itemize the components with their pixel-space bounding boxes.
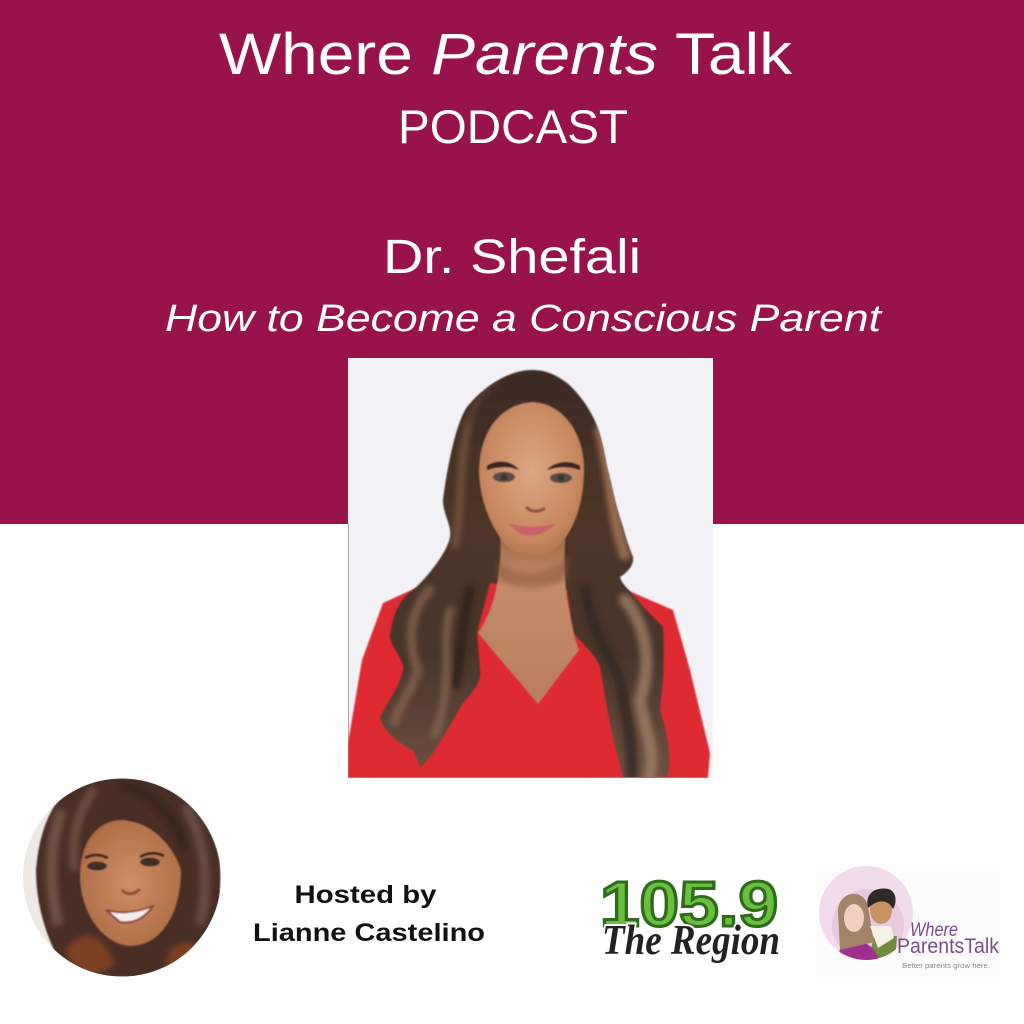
guest name: Dr. Shefali bbox=[383, 231, 641, 284]
background band bbox=[0, 0, 1024, 524]
logo: 105.9 The Region: 105.9 bbox=[600, 868, 778, 940]
hosted by label: Hosted by bbox=[294, 881, 437, 909]
logo: 105.9 The Region: The Region bbox=[602, 918, 780, 964]
host portrait bbox=[23, 778, 221, 985]
face bbox=[479, 402, 584, 555]
guest portrait bbox=[348, 358, 713, 778]
title: Where Parents Talk bbox=[219, 22, 793, 87]
subtitle: podcast: PODCAST bbox=[398, 100, 628, 153]
logo: Where Parents Talk: Where bbox=[910, 920, 958, 941]
hosted by label bbox=[253, 881, 485, 947]
logo: Where Parents Talk: ParentsTalk bbox=[897, 935, 999, 958]
hair bbox=[380, 370, 669, 777]
logo: Where Parents Talk: Better parents grow here. bbox=[902, 961, 990, 970]
episode title: How to Become a Conscious Parent bbox=[165, 298, 883, 340]
hair highlights bbox=[395, 376, 651, 775]
hosted by label: Lianne Castelino bbox=[253, 919, 485, 947]
neck and chest bbox=[478, 530, 579, 704]
facial features bbox=[487, 462, 580, 536]
logo: Where Parents Talk bbox=[816, 866, 1000, 978]
red top bbox=[348, 577, 710, 778]
logo: 105.9 The Region bbox=[600, 868, 780, 964]
